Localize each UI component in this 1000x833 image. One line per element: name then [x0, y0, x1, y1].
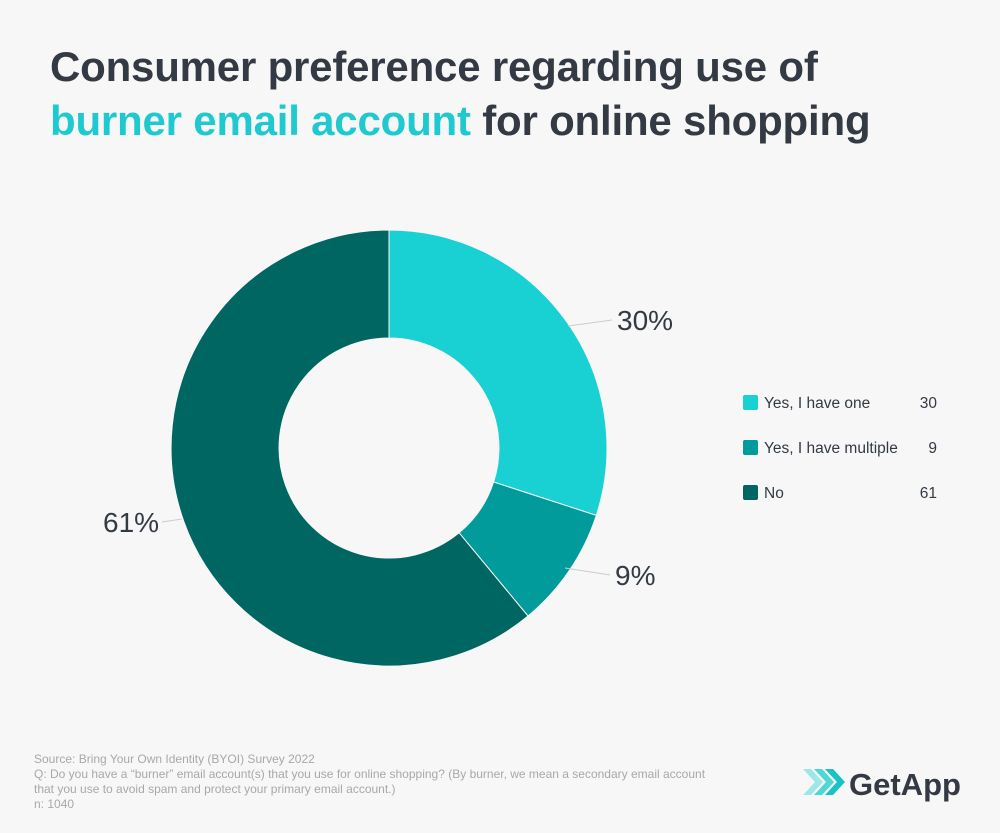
legend: 9: [928, 440, 937, 457]
label 30%: 30%: [617, 305, 673, 336]
footer source text: n: 1040: [34, 797, 74, 811]
legend: [743, 395, 937, 502]
title: Consumer preference regarding use of: [50, 43, 818, 90]
footer source text: [34, 752, 705, 811]
slice: no 61%: [171, 230, 528, 666]
footer source text: that you use to avoid spam and protect your primary email account.): [34, 782, 396, 796]
label 61%: 61%: [103, 507, 159, 538]
legend: 61: [920, 485, 937, 502]
legend: Yes, I have one: [764, 395, 870, 412]
title: [50, 43, 870, 144]
slice: yes multiple 9%: [459, 482, 596, 616]
title: burner email account for online shopping: [50, 97, 870, 144]
legend: No: [764, 485, 784, 502]
footer source text: Source: Bring Your Own Identity (BYOI) Survey 2022: [34, 752, 315, 766]
footer source text: Q: Do you have a “burner” email account(s) that you use for online shopping? (By burner, we mean a secondary email account: [34, 767, 705, 781]
legend: Yes, I have multiple: [764, 440, 898, 457]
label 9%: [565, 560, 655, 591]
slice: yes one 30%: [389, 230, 607, 515]
label 9%: 9%: [615, 560, 655, 591]
legend: 30: [920, 395, 937, 412]
label 30%: [568, 305, 673, 336]
logo: GetApp: GetApp: [849, 767, 961, 802]
